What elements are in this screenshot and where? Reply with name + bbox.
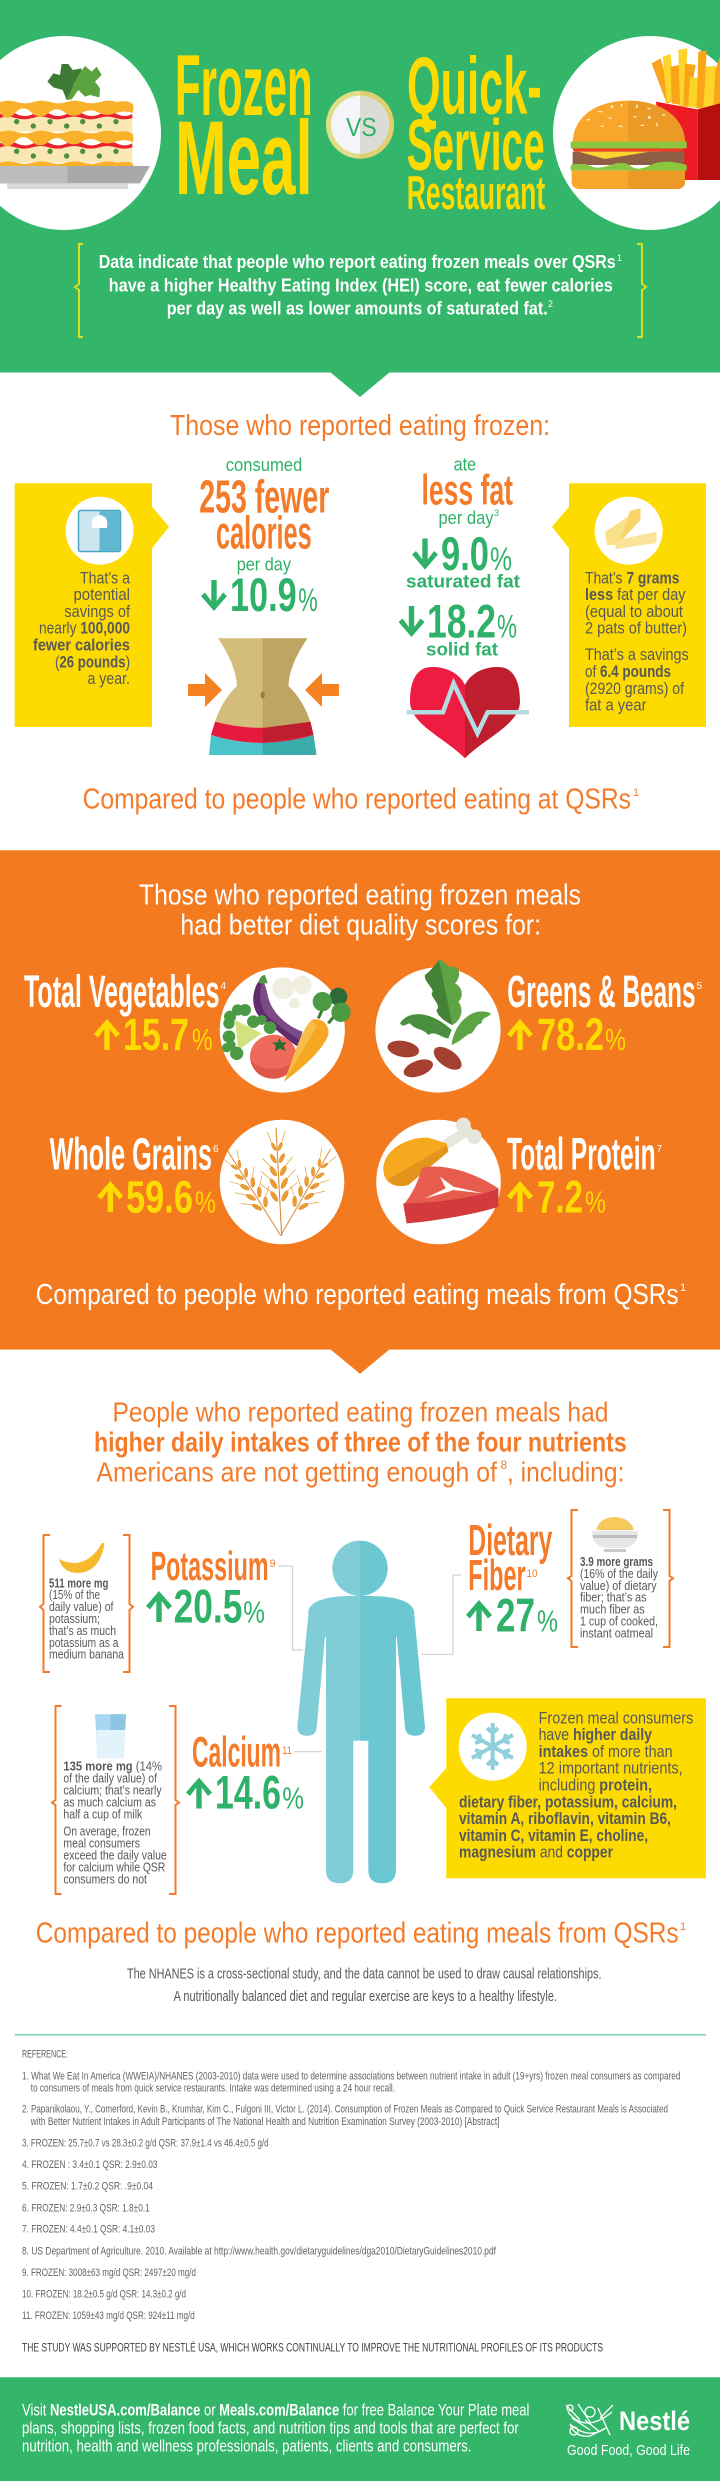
icon: butter xyxy=(595,497,663,565)
text: nutrients: have higher daily xyxy=(539,1725,652,1744)
text: fiber detail xyxy=(580,1554,658,1640)
stat: 253 fewer calories: % xyxy=(298,582,318,618)
connector: potassium xyxy=(278,1566,303,1650)
heading: those who reported eating frozen: Those who reported eating frozen: xyxy=(170,410,550,442)
stat: 253 fewer calories: calories xyxy=(216,506,312,558)
text: calorie savings: potential xyxy=(74,585,130,604)
icon: burger and fries in circle xyxy=(553,36,720,230)
heading: nutrient intakes: 8 xyxy=(500,1458,508,1472)
logo: Nestlé xyxy=(566,2404,690,2459)
heading: nutrient intakes: People who reported eating frozen meals had xyxy=(112,1397,608,1428)
text: references: to consumers of meals from quick service restaurants. Intake was determined using a 24 hour recall. xyxy=(31,2082,395,2094)
icon: heart with pulse xyxy=(406,667,529,758)
stat: total protein: 7 xyxy=(656,1144,662,1155)
stat: whole grains: 59.6 xyxy=(126,1172,193,1223)
icon: snowflake xyxy=(459,1713,527,1781)
text: footer message: Visit NestleUSA.com/Balance or Meals.com/Balance for free Balance Your Plate meal xyxy=(22,2401,529,2420)
panel: fat savings callout xyxy=(552,483,706,727)
stat: total protein: 7.2 xyxy=(537,1172,583,1223)
text: calcium detail: exceed the daily value xyxy=(63,1848,167,1862)
stat: whole grains: 6 xyxy=(213,1144,219,1155)
text: calcium detail: 135 more mg (14% xyxy=(63,1759,162,1774)
text: nutrients: intakes of more than xyxy=(539,1742,673,1761)
heading: Quick-Service Restaurant: Restaurant xyxy=(407,166,545,219)
heading: nutrient intakes xyxy=(94,1397,627,1488)
stat: total vegetables: Total Vegetables xyxy=(24,966,220,1017)
stat: whole grains xyxy=(50,1128,219,1223)
text: calcium detail: calcium; that’s nearly xyxy=(63,1782,162,1798)
text: references xyxy=(22,2049,680,2355)
text: calorie savings: savings of xyxy=(64,602,130,621)
icon: bathroom scale xyxy=(66,497,134,565)
text: calorie savings: fewer calories xyxy=(33,636,130,654)
text: references: 7. FROZEN: 4.4±0.1 QSR: 4.1±0.03 xyxy=(22,2224,155,2236)
text: nutrients: vitamin C, vitamin E, choline, xyxy=(459,1826,648,1845)
caption: compared to QSRs: Compared to people who reported eating at QSRs xyxy=(83,783,631,815)
text: nutrients xyxy=(459,1708,693,1862)
text: calcium detail: for calcium while QSR xyxy=(63,1859,165,1874)
text: fiber detail: 3.9 more grams xyxy=(580,1554,653,1569)
stat: whole grains: % xyxy=(195,1185,216,1220)
text: potassium detail: that’s as much xyxy=(49,1623,116,1638)
stat: total protein: % xyxy=(585,1185,606,1220)
logo: Nestlé: Nestlé xyxy=(619,2406,690,2436)
text: fiber detail: instant oatmeal xyxy=(580,1625,653,1640)
text: references: 5. FROZEN: 1.7±0.2 QSR: .9±0.04 xyxy=(22,2180,153,2192)
stat: less fat per day: 18.2 xyxy=(427,594,496,647)
text: footer message: nutrition, health and wellness professionals, patients, clients and consumers. xyxy=(22,2437,471,2456)
stat: whole grains: Whole Grains xyxy=(50,1128,212,1180)
text: potassium detail: potassium; xyxy=(49,1611,100,1626)
panel: header: Frozen xyxy=(175,38,313,134)
panel: footer xyxy=(0,2377,720,2481)
text: footer message: plans, shopping lists, frozen food facts, and nutrition tips and tools that are perfect for xyxy=(22,2418,519,2437)
text: intro: 1 xyxy=(617,253,622,263)
text: footer message xyxy=(22,2401,529,2456)
stat: potassium: 20.5 xyxy=(174,1580,242,1633)
text: potassium detail: daily value) of xyxy=(49,1599,114,1614)
stat: less fat per day: 9.0 xyxy=(441,527,489,580)
text: references: 8. US Department of Agriculture. 2010. Available at http://www.health.gov/dietaryguidelines/dga2010/DietaryGuidelines2010.pdf xyxy=(22,2245,497,2257)
stat: potassium: 9 xyxy=(270,1558,276,1570)
text: nutrients: dietary fiber, potassium, calcium, xyxy=(459,1792,677,1811)
text: fiber detail: fiber; that’s as xyxy=(580,1590,647,1605)
stat: greens and beans: 78.2 xyxy=(537,1009,604,1060)
icon: vegetables xyxy=(220,967,351,1093)
panel: diet quality scores xyxy=(0,850,720,1374)
stat: potassium xyxy=(146,1543,276,1633)
text: calorie savings xyxy=(33,568,130,688)
text: fiber detail: value) of dietary xyxy=(580,1578,657,1593)
text: references: 6. FROZEN: 2.9±0.3 QSR: 1.8±0.1 xyxy=(22,2203,150,2215)
text: fat savings: (2920 grams) of xyxy=(585,679,684,698)
stat: less fat per day: % xyxy=(497,608,517,644)
text: intro xyxy=(99,251,622,318)
text: calorie savings: (26 pounds) xyxy=(55,652,130,671)
stat: total protein xyxy=(507,1128,662,1223)
stat: potassium: Potassium xyxy=(151,1543,269,1589)
stat: 253 fewer calories xyxy=(199,455,329,622)
stat: greens and beans: % xyxy=(605,1022,626,1057)
text: calcium detail: as much calcium as xyxy=(63,1794,156,1809)
text: calcium detail: consumers do not xyxy=(63,1871,147,1886)
heading: Quick-Service Restaurant xyxy=(407,41,545,219)
icon: greens and beans xyxy=(375,960,501,1093)
stat: less fat per day xyxy=(398,455,520,660)
icon: waist with arrows xyxy=(188,638,339,755)
text: fat savings: (equal to about xyxy=(585,602,683,621)
badge: VS xyxy=(326,91,394,159)
heading: diet quality: Those who reported eating frozen meals xyxy=(139,880,581,912)
text: potassium detail: (15% of the xyxy=(49,1587,100,1602)
stat: dietary fiber: Fiber xyxy=(468,1551,526,1600)
stat: 253 fewer calories: 253 fewer xyxy=(199,471,329,523)
panel: nutrients callout xyxy=(429,1698,706,1878)
heading: nutrient intakes: , including: xyxy=(507,1457,624,1488)
panel: header xyxy=(0,0,720,397)
stat: greens and beans xyxy=(507,966,702,1060)
badge: VS: VS xyxy=(346,112,377,142)
text: fat savings: That’s 7 grams xyxy=(585,568,680,587)
text: references: 9. FROZEN: 3008±63 mg/d QSR: 2497±20 mg/d xyxy=(22,2267,196,2279)
stat: calcium xyxy=(186,1729,304,1818)
stat: greens and beans: 5 xyxy=(696,981,702,992)
stat: total vegetables: % xyxy=(192,1022,213,1057)
stat: total vegetables: 4 xyxy=(220,981,226,992)
stat: less fat per day: solid fat xyxy=(426,640,498,660)
text: references: 10. FROZEN: 18.2±0.5 g/d QSR: 14.3±0.2 g/d xyxy=(22,2289,186,2301)
text: calcium detail: On average, frozen xyxy=(63,1824,151,1839)
text: fiber detail: 1 cup of cooked, xyxy=(580,1614,658,1628)
stat: 253 fewer calories: consumed xyxy=(226,455,302,475)
bracket: intro left xyxy=(75,244,83,337)
text: intro: have a higher Healthy Eating Index (HEI) score, eat fewer calories xyxy=(109,275,613,296)
text: references: REFERENCE: xyxy=(22,2049,68,2061)
icon: human figure xyxy=(297,1541,425,1883)
stat: total vegetables xyxy=(24,966,226,1060)
text: fat savings: less fat per day xyxy=(585,585,686,604)
logo: Nestlé: Good Food, Good Life xyxy=(567,2442,690,2459)
stat: calcium: % xyxy=(282,1780,304,1815)
text: potassium detail: potassium as a xyxy=(49,1635,119,1650)
stat: dietary fiber: 27 xyxy=(496,1589,535,1642)
stat: dietary fiber: % xyxy=(537,1604,558,1639)
text: calorie savings: nearly 100,000 xyxy=(39,619,130,638)
callout: potassium detail xyxy=(40,1535,133,1672)
stat: less fat per day: ate xyxy=(454,455,476,475)
text: calcium detail xyxy=(63,1759,167,1886)
stat: calcium: 14.6 xyxy=(215,1765,281,1818)
connector: fiber xyxy=(422,1575,461,1654)
text: references: 4. FROZEN : 3.4±0.1 QSR: 2.9±0.03 xyxy=(22,2159,158,2171)
heading: Quick-Service Restaurant: Service xyxy=(407,106,545,186)
heading: Frozen Meal: Meal xyxy=(175,100,313,217)
stat: less fat per day: per day xyxy=(438,508,494,528)
heading: diet quality xyxy=(139,880,581,942)
text: nutrients: including protein, xyxy=(539,1776,652,1794)
icon: glass of milk xyxy=(95,1714,126,1758)
text: potassium detail: medium banana xyxy=(49,1647,125,1662)
stat: 253 fewer calories: 10.9 xyxy=(230,569,297,622)
text: intro: Data indicate that people who report eating frozen meals over QSRs xyxy=(99,251,616,272)
text: references: 3. FROZEN: 25.7±0.7 vs 28.3±0.2 g/d QSR: 37.9±1.4 vs 46.4±0.5 g/d xyxy=(22,2138,269,2150)
text: fat savings: That’s a savings xyxy=(585,645,689,664)
caption: compared to meals from QSRs: 1 xyxy=(680,1282,686,1294)
icon: chicken and steak xyxy=(376,1118,501,1244)
text: disclaimer: A nutritionally balanced diet and regular exercise are keys to a healthy lifestyle. xyxy=(174,1988,557,2005)
stat: potassium: % xyxy=(243,1595,265,1630)
text: nutrients: magnesium and copper xyxy=(459,1843,613,1862)
stat: dietary fiber: 10 xyxy=(526,1568,538,1580)
text: calcium detail: of the daily value) of xyxy=(63,1771,157,1786)
stat: less fat per day: 3 xyxy=(494,508,499,518)
icon: lasagna in circle xyxy=(0,36,161,230)
stat: less fat per day: less fat xyxy=(422,466,513,514)
text: disclaimer xyxy=(127,1965,602,2005)
text: calcium detail: half a cup of milk xyxy=(63,1806,143,1821)
text: fat savings: of 6.4 pounds xyxy=(585,662,671,681)
heading: Quick-Service Restaurant: Quick- xyxy=(407,41,542,131)
stat: dietary fiber: Dietary xyxy=(468,1516,553,1565)
panel: calorie savings callout xyxy=(15,483,169,727)
text: intro: 2 xyxy=(548,299,553,309)
stat: calcium: Calcium xyxy=(192,1729,281,1777)
text: nutrients: 12 important nutrients, xyxy=(539,1759,683,1778)
icon: wheat xyxy=(214,1120,345,1244)
text: fiber detail: much fiber as xyxy=(580,1602,645,1617)
stat: less fat per day: % xyxy=(490,541,512,577)
stat: 253 fewer calories: per day xyxy=(237,555,291,575)
connector: calcium xyxy=(294,1751,322,1753)
text: fat savings: 2 pats of butter) xyxy=(585,619,687,638)
heading: nutrient intakes: Americans are not getting enough of xyxy=(96,1457,497,1488)
text: potassium detail xyxy=(49,1575,125,1662)
text: fat savings: fat a year xyxy=(585,696,647,715)
icon: banana xyxy=(59,1543,104,1573)
text: fiber detail: (16% of the daily xyxy=(580,1566,658,1581)
text: calorie savings: a year. xyxy=(88,669,130,688)
callout: calcium detail xyxy=(52,1706,179,1894)
text: references: 11. FROZEN: 1059±43 mg/d QSR: 924±11 mg/d xyxy=(22,2310,195,2322)
stat: calcium: 11 xyxy=(282,1745,292,1757)
heading: Frozen Meal xyxy=(175,38,313,217)
caption: compared to meals from QSRs: 1 xyxy=(680,1921,686,1933)
callout: fiber detail xyxy=(568,1510,673,1647)
text: intro: per day as well as lower amounts of saturated fat. xyxy=(167,297,548,318)
stat: dietary fiber xyxy=(466,1516,558,1642)
bracket: intro right xyxy=(637,244,646,337)
text: potassium detail: 511 more mg xyxy=(49,1575,108,1590)
caption: compared to QSRs: 1 xyxy=(633,787,639,799)
text: nutrients: vitamin A, riboflavin, vitamin B6, xyxy=(459,1809,671,1828)
text: fat savings xyxy=(585,568,689,715)
heading: diet quality: had better diet quality scores for: xyxy=(180,910,541,942)
text: nutrients: Frozen meal consumers xyxy=(539,1708,693,1727)
text: calcium detail: meal consumers xyxy=(63,1836,140,1851)
stat: total vegetables: 15.7 xyxy=(123,1009,189,1060)
stat: less fat per day: saturated fat xyxy=(406,572,520,592)
text: calorie savings: That’s a xyxy=(80,568,130,587)
text: references: with Better Nutrient Intakes in Adult Participants of The National Health and Nutrition Examination Survey (2003-2010) [Abstract] xyxy=(30,2116,499,2128)
icon: oatmeal bowl xyxy=(592,1517,638,1552)
